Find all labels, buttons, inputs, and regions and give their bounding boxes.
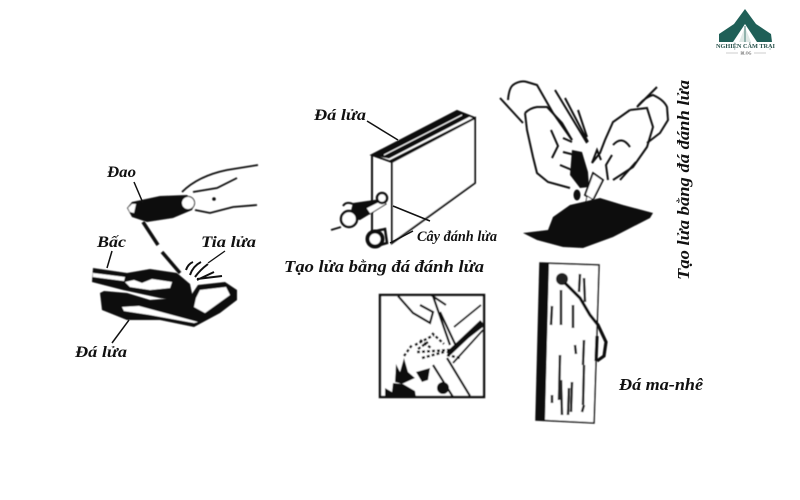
label: Đá lửa: Đá lửa — [74, 344, 127, 361]
icon: fingers and flint in hands — [570, 150, 603, 210]
pointer: Đá lửa — [367, 121, 398, 140]
panel: striking close-up square — [380, 295, 484, 397]
icon: striker close-up — [398, 295, 484, 397]
icon: magnesium block — [536, 263, 606, 423]
icon: knife blade — [143, 222, 180, 273]
icon: sparks — [186, 262, 222, 280]
label: Bấc: Bấc — [96, 234, 126, 251]
logo: Nghiện Cắm Trại blog: NGHIỆN CẮM TRẠI — [716, 42, 776, 50]
panel: flint and knife illustration — [74, 164, 258, 361]
icon: hand holding knife — [127, 165, 258, 222]
panel: flint block with striker — [284, 107, 497, 276]
pointers: Cây đánh lửa — [390, 206, 430, 243]
label: Đá ma-nhê: Đá ma-nhê — [618, 375, 704, 394]
icon: flint block — [372, 111, 475, 243]
icon: chain loop — [565, 283, 606, 361]
label: Cây đánh lửa: Cây đánh lửa — [417, 229, 497, 245]
logo: Nghiện Cắm Trại blog: BLOG — [741, 52, 752, 56]
label: Tia lửa: Tia lửa — [201, 234, 256, 251]
pointer: Tia lửa — [208, 251, 225, 263]
caption: vertical Tạo lửa bằng đá đánh lửa: Tạo lửa bằng đá đánh lửa — [674, 80, 693, 280]
label: Đá lửa: Đá lửa — [313, 107, 366, 124]
pointer: Đao — [134, 182, 143, 203]
icon: striker — [331, 193, 387, 246]
icon: wick and flint stone — [92, 268, 237, 327]
logo: Nghiện Cắm Trại blog — [716, 9, 776, 56]
panel: hands striking over tinder — [500, 80, 693, 280]
pointer: Bấc — [107, 251, 112, 268]
label: Đao: Đao — [106, 164, 136, 181]
icon: sparks and tinder — [385, 358, 430, 397]
pointer: Đá lửa — [112, 320, 129, 343]
caption: Tạo lửa bằng đá đánh lửa: Tạo lửa bằng đá đánh lửa — [284, 257, 484, 276]
icon: tinder pile — [523, 198, 653, 248]
icon: left hand — [500, 81, 588, 188]
icon: right hand — [592, 87, 668, 180]
